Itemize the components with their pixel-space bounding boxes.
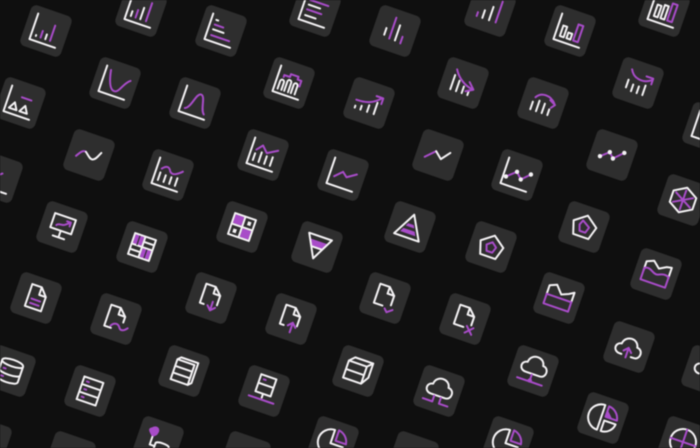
icon: document rejected — [438, 292, 492, 346]
icon: u curve — [88, 56, 142, 110]
icon: partial tile — [43, 430, 97, 448]
icon: document upload — [264, 292, 318, 346]
icon: rising arrow with bars — [342, 76, 396, 130]
icon: pentagon radar — [557, 200, 611, 254]
icon: u arrow with bars — [611, 56, 665, 110]
icon: grid dashboard — [215, 200, 269, 254]
icon: partial cloud — [680, 344, 700, 398]
icon: zigzag line — [411, 128, 465, 182]
icon: dotted line chart — [490, 148, 544, 202]
icon: divided pie chart — [656, 415, 700, 448]
icon: outlined bars — [637, 0, 691, 38]
icon: bars with zigzag — [236, 128, 290, 182]
icon: horizontal bars — [288, 0, 342, 38]
icon: exploded pie chart — [576, 391, 630, 445]
icon: document download — [184, 271, 238, 325]
icon: partial line chart — [0, 150, 24, 204]
icon: arc arrow with bars — [516, 76, 570, 130]
icon: pie chart — [306, 415, 360, 448]
icon: cloud upload — [602, 320, 656, 374]
icon: data table — [115, 220, 169, 274]
icon: 3d server stack — [157, 344, 211, 398]
icon: presentation monitor — [35, 200, 89, 254]
icon: grouped histogram — [262, 56, 316, 110]
icon: bell curve — [168, 76, 222, 130]
icon: partial tile — [218, 430, 272, 448]
icon: bar chart — [19, 4, 73, 58]
icon: area chart — [629, 247, 683, 301]
icon: dotted line — [585, 128, 639, 182]
icon: area folder — [532, 271, 586, 325]
icon: bars with wave — [141, 148, 195, 202]
icon: line chart — [316, 148, 370, 202]
icon: cloud connection — [506, 344, 560, 398]
icon: pie chart with slice — [481, 415, 535, 448]
icon: pentagon — [464, 220, 518, 274]
icon: location database — [131, 415, 185, 448]
icon: vertical bars — [368, 4, 422, 58]
icon: partial tile — [386, 430, 440, 448]
icon: triangle chart — [0, 76, 47, 130]
icon: wave line — [62, 128, 116, 182]
icon: 3d box stack — [331, 344, 385, 398]
icon: database — [0, 344, 37, 398]
icon: rising bar chart — [114, 0, 168, 38]
icon: horizontal bars — [194, 4, 248, 58]
icon: rising bars — [463, 0, 517, 38]
icon: partial axes chart — [681, 101, 700, 155]
icon: document with wave — [89, 292, 143, 346]
icon: document approved — [358, 271, 412, 325]
icon: pyramid — [383, 200, 437, 254]
icon: funnel — [290, 220, 344, 274]
icon: cloud network — [412, 364, 466, 418]
icon: server stack — [63, 364, 117, 418]
icon: outlined bars — [543, 4, 597, 58]
icon: hexagon radar — [656, 173, 700, 227]
icon: network server — [237, 364, 291, 418]
icon: falling arrow with bars — [436, 56, 490, 110]
icon: document with lines — [9, 271, 63, 325]
icon: partial tile — [0, 415, 13, 448]
